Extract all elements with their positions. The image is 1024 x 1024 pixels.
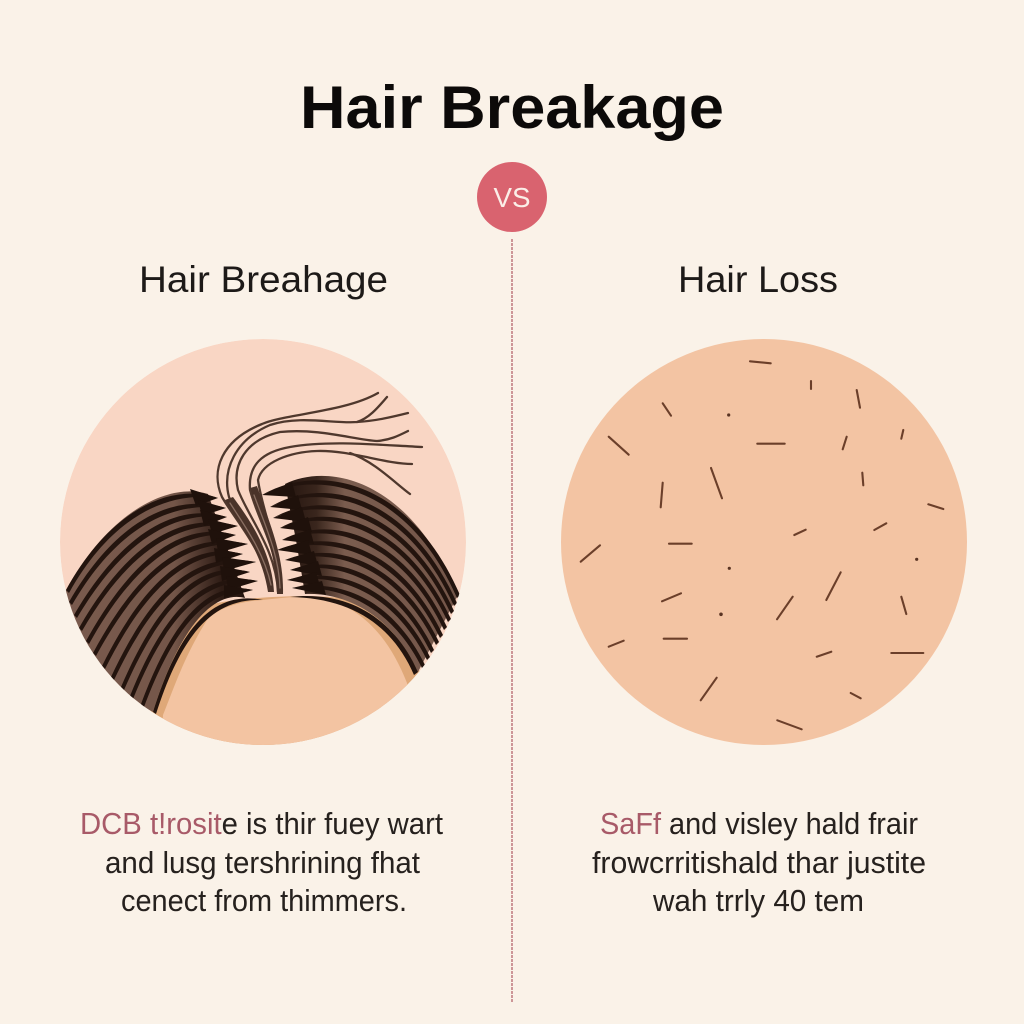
broken flyaway strands (218, 393, 422, 594)
heading: hair loss: Hair Loss (678, 259, 838, 300)
heading: hair breakage: Hair Breahage (139, 259, 388, 300)
text block: hair loss description: SaFf and visley hald frair (600, 806, 918, 841)
vs badge: VS (494, 182, 530, 213)
text block: hair loss description: wah trrly 40 tem (652, 883, 864, 918)
right hair mass (262, 476, 460, 675)
text block: hair breakage description: DCB t!rosite is thir fuey wart (80, 806, 443, 841)
follicle dots (719, 413, 918, 616)
text block: hair breakage description (80, 806, 443, 918)
text block: hair loss description (592, 806, 926, 918)
left hair mass (66, 489, 263, 714)
panel: hair breakage illustration (40, 339, 466, 760)
center divider line (511, 239, 513, 1002)
chunky right hair tips (262, 482, 326, 595)
text block: hair breakage description: cenect from thimmers. (121, 883, 407, 918)
sparse short hairs (581, 361, 943, 729)
panel: hair loss scalp with sparse hairs (561, 339, 967, 745)
text block: hair loss description: frowcrritishald thar justite (592, 845, 926, 880)
chunky left hair tips (190, 489, 258, 598)
vs badge (477, 162, 547, 232)
text block: hair breakage description: and lusg tershrining fhat (105, 845, 420, 880)
scalp (150, 596, 420, 745)
title: Hair Breakage (300, 74, 724, 141)
